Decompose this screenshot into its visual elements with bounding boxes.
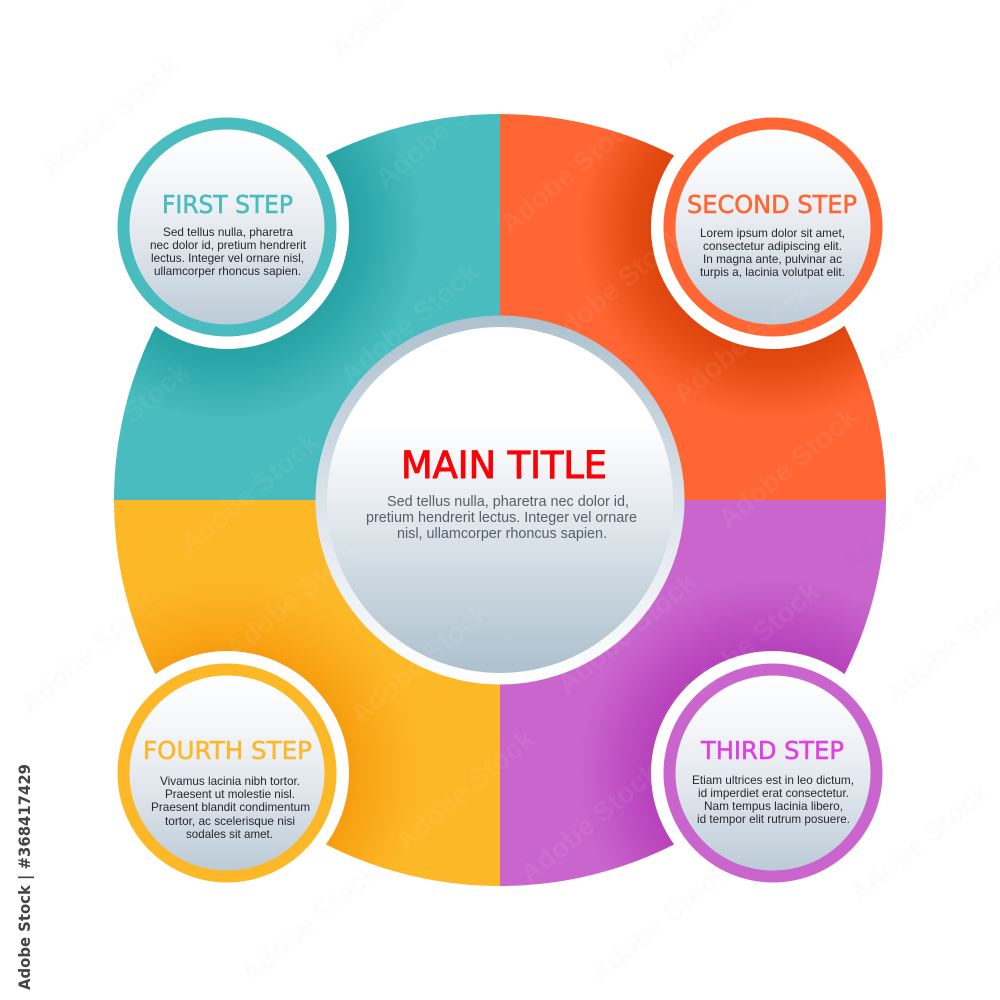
segment: second step orange quadrant [500,114,886,500]
fourth step body text: Praesent ut molestie nisl. [165,788,295,801]
stock watermark pattern: Adobe Stock [712,401,863,535]
segment: first step teal quadrant [114,114,500,500]
stock watermark pattern: Adobe Stock [584,856,735,990]
stock watermark pattern: Adobe Stock [369,61,520,195]
heading: third step: THIRD STEP [700,736,844,765]
stock watermark pattern: Adobe Stock [14,586,165,720]
fourth step body text: sodales sit amet. [186,828,273,841]
stock watermark pattern: Adobe Stock [219,531,370,665]
stock watermark pattern: Adobe Stock [34,51,185,185]
centre body text: Sed tellus nulla, pharetra nec dolor id, [387,494,629,510]
centre body text: pretium hendrerit lectus. Integer vel ornare [366,510,637,526]
fourth step body text: Praesent blandit condimentum [151,801,310,814]
stock watermark pattern: Adobe Stock [334,256,485,390]
third step body text: id imperdiet erat consectetur. [698,787,849,800]
panel: second step [651,105,895,349]
stock watermark pattern: Adobe Stock [44,356,195,490]
centre body text: nisl, ullamcorper rhoncus sapien. [397,526,607,542]
second step body text [700,227,845,279]
stock watermark pattern: Adobe Stock [674,576,825,710]
second step body text: consectetur adipiscing elit. [703,240,842,253]
panel: fourth step [105,651,349,895]
stock watermark pattern: Adobe Stock [514,756,665,890]
second step body text: Lorem ipsum dolor sit amet, [700,227,845,240]
first step body text [150,226,307,278]
panel: centre circle [316,316,684,684]
heading: fourth step: FOURTH STEP [143,736,312,765]
segment: third step purple quadrant [500,500,886,886]
stock watermark pattern: Adobe Stock [344,596,495,730]
stock watermark pattern: Adobe Stock [174,426,325,560]
third step body text [692,774,854,826]
heading: first step: FIRST STEP [162,190,293,219]
stock id label: Adobe Stock | #368417429 [15,764,35,990]
first step body text: nec dolor id, pretium hendrerit [150,239,307,252]
segment: fourth step yellow quadrant [114,500,500,886]
stock watermark pattern: Adobe Stock [551,566,702,700]
third step body text: id tempor elit rutrum posuere. [697,813,850,826]
centre body text [366,494,637,542]
stock watermark pattern: Adobe Stock [667,276,818,410]
third step body text: Nam tempus lacinia libero, [704,800,843,813]
heading: second step: SECOND STEP [687,190,857,219]
stock watermark pattern: Adobe Stock [234,856,385,990]
third step body text: Etiam ultrices est in leo dictum, [692,774,854,787]
panel: first step [105,105,349,349]
first step body text: Sed tellus nulla, pharetra [163,226,293,239]
first step body text: ullamcorper rhoncus sapien. [154,265,301,278]
fourth step body text: tortor, ac scelerisque nisi [165,815,295,828]
first step body text: lectus. Integer vel ornare nisl, [151,252,304,265]
main title: MAIN TITLE [401,443,607,487]
stock watermark pattern: Adobe Stock [494,106,645,240]
second step body text: In magna ante, pulvinar ac [703,253,842,266]
stock watermark pattern: Adobe Stock [389,723,540,857]
stock watermark pattern: Adobe Stock [844,776,995,910]
stock watermark pattern: Adobe Stock [539,221,690,355]
fourth step body text [151,775,310,841]
fourth step body text: Vivamus lacinia nibh tortor. [160,775,300,788]
panel: third step [651,651,895,895]
stock watermark pattern: Adobe Stock [834,446,985,580]
second step body text: turpis a, lacinia volutpat elit. [700,266,845,279]
